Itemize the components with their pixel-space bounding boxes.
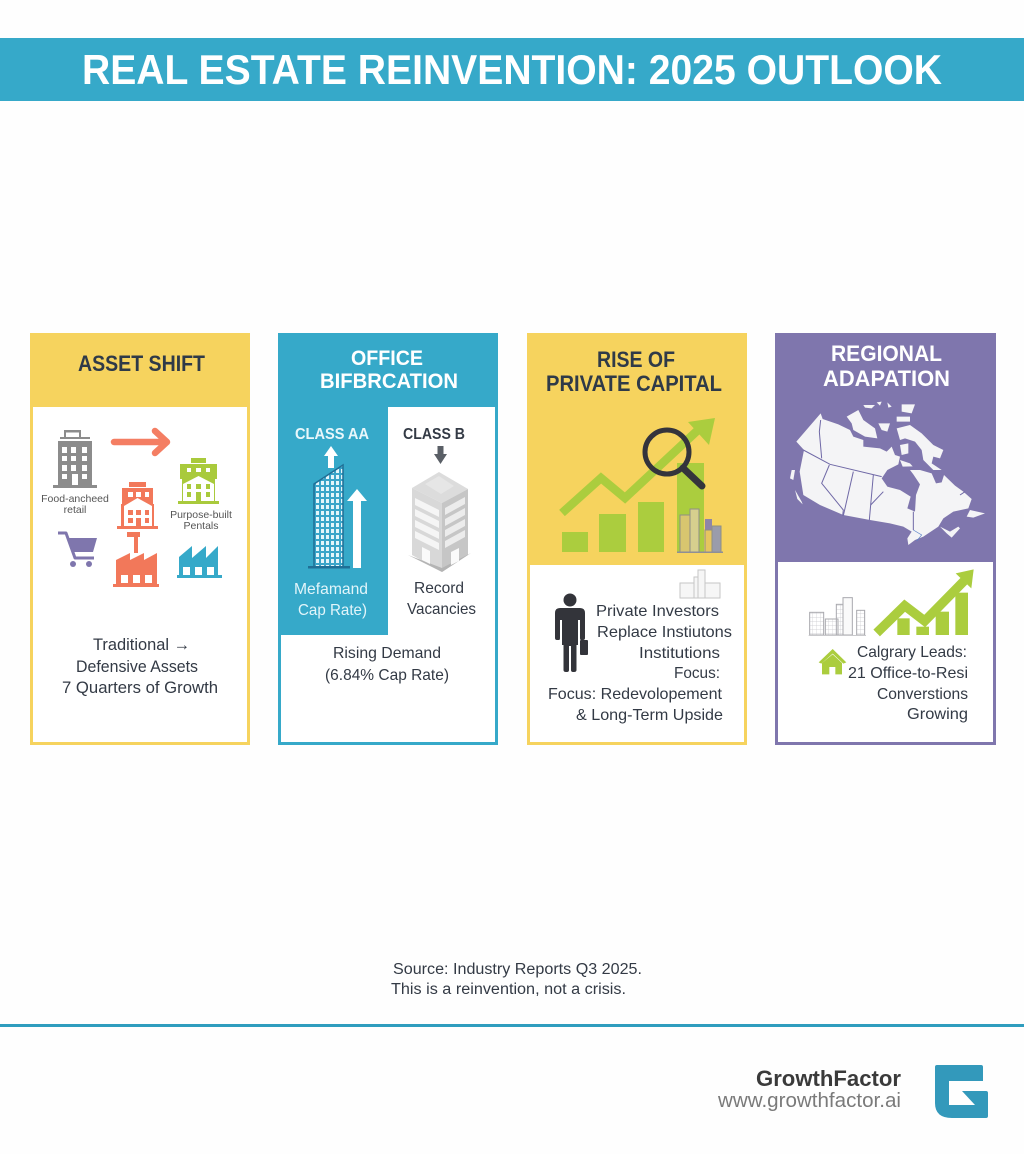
text: asset shift summary: 7 Quarters of Growth bbox=[62, 679, 218, 697]
text: asset shift summary bbox=[62, 636, 218, 697]
icon: shopping cart bbox=[58, 533, 97, 567]
text: private investors: Focus: Redevolopement bbox=[548, 686, 723, 703]
text: asset shift summary: Defensive Assets bbox=[76, 658, 198, 676]
panel heading: asset shift bbox=[30, 333, 250, 407]
text: rising demand: (6.84% Cap Rate) bbox=[325, 667, 449, 684]
source note: This is a reinvention, not a crisis. bbox=[391, 981, 626, 998]
arrow: growth trend bbox=[562, 418, 715, 513]
panel heading: regional adaptation: ADAPATION bbox=[823, 366, 950, 391]
icon: pale city outline bbox=[809, 598, 866, 635]
label: food-anchored retail: retail bbox=[64, 504, 86, 516]
icon: red building bbox=[117, 482, 158, 529]
panel heading: rise of private capital: RISE OF bbox=[597, 347, 675, 372]
text: calgary leads: Calgrary Leads: bbox=[857, 644, 967, 661]
text: asset shift summary: Traditional → bbox=[93, 636, 190, 654]
panel: asset shift bbox=[30, 333, 250, 744]
text: private investors: Institutions bbox=[639, 645, 720, 662]
icon: small down arrow bbox=[434, 446, 447, 464]
title banner bbox=[0, 38, 1024, 101]
label: food-anchored retail: Food-ancheed bbox=[41, 493, 109, 505]
chart: green growth with bars bbox=[877, 569, 974, 635]
footer brand name and URL: GrowthFactor bbox=[756, 1066, 901, 1091]
panel heading: office bifurcation: OFFICE bbox=[351, 347, 423, 370]
icon: orange factory with crane bbox=[113, 532, 159, 587]
icon: mini city on chart bbox=[677, 509, 723, 553]
logo: GrowthFactor G bbox=[935, 1065, 988, 1118]
panel heading: regional adaptation bbox=[775, 333, 996, 562]
text: class AA details bbox=[294, 581, 368, 619]
text: calgary leads bbox=[848, 644, 968, 723]
panel: office bifurcation bbox=[278, 333, 498, 744]
label: class AA: CLASS AA bbox=[295, 426, 369, 443]
text: private investors: Replace Instiutons bbox=[597, 624, 732, 641]
icon: big up arrow bbox=[347, 489, 367, 568]
text: class B details bbox=[407, 580, 476, 618]
label: food-anchored retail bbox=[41, 493, 109, 516]
icon: small up arrow bbox=[324, 446, 338, 468]
icon: class AA glass tower bbox=[308, 465, 350, 568]
text: calgary leads: Growing bbox=[907, 706, 968, 723]
panel heading: asset shift: ASSET SHIFT bbox=[78, 351, 205, 376]
text: class B details: Vacancies bbox=[407, 601, 476, 618]
label: purpose-built rentals: Pentals bbox=[183, 520, 219, 532]
label: purpose-built rentals: Purpose-built bbox=[170, 509, 232, 521]
panel heading: regional adaptation: REGIONAL bbox=[831, 341, 942, 366]
text: rising demand bbox=[325, 645, 449, 684]
panel heading: office bifurcation: BIFBRCATION bbox=[320, 370, 458, 393]
source note: Source: Industry Reports Q3 2025. bbox=[393, 961, 642, 978]
text: class AA details: Mefamand bbox=[294, 581, 368, 598]
source note bbox=[391, 961, 642, 998]
title banner: REAL ESTATE REINVENTION: 2025 OUTLOOK bbox=[82, 46, 942, 93]
icon: magnifying glass bbox=[645, 430, 702, 486]
text: private investors bbox=[548, 603, 732, 724]
panel heading: rise of private capital: PRIVATE CAPITAL bbox=[546, 371, 722, 396]
panel: regional adaptation bbox=[775, 333, 996, 744]
icon: class B grey building bbox=[408, 472, 471, 572]
panel heading: office bifurcation bbox=[278, 333, 498, 635]
text: class AA details: Cap Rate) bbox=[298, 602, 367, 619]
label: class B: CLASS B bbox=[403, 426, 465, 443]
icon: green house bbox=[819, 649, 846, 674]
text: calgary leads: 21 Office-to-Resi bbox=[848, 665, 968, 682]
icon: grey office building bbox=[53, 430, 97, 488]
map: Canada bbox=[790, 402, 985, 545]
text: private investors: & Long-Term Upside bbox=[576, 707, 723, 724]
text: private investors: Private Investors bbox=[596, 603, 719, 620]
text: private investors: Focus: bbox=[674, 665, 720, 682]
panel heading: rise of private capital bbox=[527, 333, 747, 565]
text: rising demand: Rising Demand bbox=[333, 645, 441, 662]
chart: rising green bars bbox=[562, 463, 704, 552]
text: class B details: Record bbox=[414, 580, 464, 597]
footer brand name and URL: www.growthfactor.ai bbox=[717, 1090, 901, 1112]
panel: rise of private capital bbox=[527, 333, 747, 744]
text: calgary leads: Converstions bbox=[877, 686, 968, 703]
icon: faint skyline bbox=[680, 570, 720, 598]
footer brand name and URL bbox=[717, 1066, 901, 1112]
arrow: shift to the right bbox=[114, 431, 167, 453]
icon: green rental building bbox=[178, 458, 219, 504]
icon: investor silhouette bbox=[555, 594, 588, 672]
label: purpose-built rentals bbox=[170, 509, 232, 532]
icon: blue factory bbox=[177, 546, 222, 578]
